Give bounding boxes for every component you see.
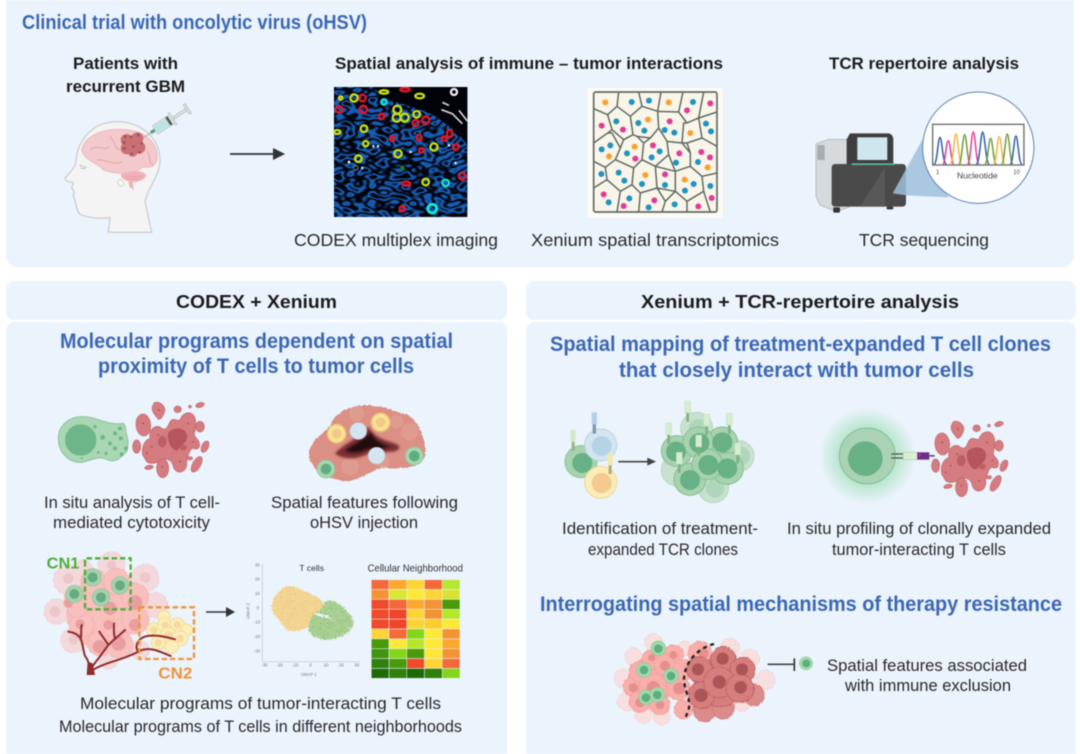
- heading: patients with recurrent GBM: Patients with: [73, 54, 178, 73]
- icon: clonal T cell expansion: [565, 401, 754, 503]
- chart: cellular neighborhood heatmap: Cellular Neighborhood: [368, 564, 463, 575]
- caption: treatment-expanded clones: [562, 520, 758, 559]
- chart: T cells UMAP: 0: [257, 605, 260, 610]
- chart: cellular neighborhood heatmap: [368, 564, 463, 678]
- heading: spatial mapping: Spatial mapping of treatment-expanded T cell clones: [550, 333, 1051, 356]
- panel header: Xenium + TCR-repertoire analysis: [526, 281, 1076, 320]
- panel header: Xenium + TCR-repertoire analysis: Xenium + TCR-repertoire analysis: [641, 292, 959, 312]
- chart: T cells UMAP: -30: [254, 648, 261, 653]
- chart: T cells UMAP: UMAP 2: [246, 602, 251, 619]
- caption: TCR sequencing: TCR sequencing: [859, 230, 989, 250]
- chart: T cells UMAP: 30: [255, 562, 260, 567]
- chart: T cells UMAP: -20: [254, 634, 261, 639]
- caption: molecular programs of T cells: [59, 695, 462, 736]
- icon: glowing T cell binding tumor cell: [819, 408, 1010, 504]
- icon: sequencer with chromatogram callout: 1: [936, 170, 940, 176]
- caption: in situ profiling: [787, 520, 1051, 559]
- caption: spatial features: Spatial features following: [271, 494, 458, 512]
- caption: T cell cytotoxicity: In situ analysis of T cell-: [44, 494, 220, 512]
- panel header: CODEX + Xenium: [6, 281, 507, 320]
- chart: T cells UMAP: 0: [309, 662, 312, 667]
- caption: Xenium: Xenium spatial transcriptomics: [531, 230, 779, 250]
- heading: spatial mapping: [550, 333, 1051, 382]
- heading: clinical trial: Clinical trial with oncolytic virus (oHSV): [22, 12, 367, 34]
- caption: treatment-expanded clones: Identification of treatment-: [562, 520, 758, 538]
- caption: molecular programs of T cells: Molecular programs of tumor-interacting T cells: [80, 695, 441, 713]
- caption: immune exclusion: with immune exclusion: [844, 677, 1011, 695]
- illustration: cellular neighborhoods CN1 and CN2: [44, 552, 194, 682]
- caption: T cell cytotoxicity: mediated cytotoxicity: [53, 514, 211, 532]
- heading: TCR repertoire analysis: TCR repertoire analysis: [829, 54, 1019, 73]
- caption: treatment-expanded clones: expanded TCR clones: [588, 541, 738, 559]
- caption: CODEX: CODEX multiplex imaging: [294, 230, 498, 250]
- illustration: immune exclusion at tumor boundary: [614, 634, 775, 725]
- heading: molecular programs: proximity of T cells to tumor cells: [98, 355, 414, 378]
- panel: CODEX + Xenium findings: [6, 322, 507, 754]
- chart: T cells UMAP: T cells: [299, 563, 325, 573]
- chart: T cells UMAP: -10: [254, 620, 261, 625]
- caption: in situ profiling: In situ profiling of clonally expanded: [787, 520, 1051, 538]
- chart: T cells UMAP: 10: [255, 591, 260, 596]
- chart: T cells UMAP: -20: [277, 662, 283, 667]
- icon: T cell attacking tumor cell: [58, 402, 211, 478]
- panel: Xenium + TCR findings: [526, 322, 1076, 754]
- icon: inhibition of T cell: [768, 656, 813, 671]
- heading: patients with recurrent GBM: [66, 54, 185, 96]
- panel: clinical trial overview: [6, 0, 1074, 267]
- heading: spatial mapping: that closely interact with tumor cells: [619, 359, 974, 382]
- chart: T cells UMAP: 20: [255, 577, 260, 582]
- caption: spatial features: oHSV injection: [310, 514, 418, 532]
- chart: T cells UMAP: -30: [261, 662, 268, 667]
- icon: sequencer with chromatogram callout: [816, 92, 1034, 213]
- icon: sequencer with chromatogram callout: 10: [1013, 170, 1021, 176]
- caption: immune exclusion: Spatial features associated: [827, 657, 1027, 675]
- chart: T cells UMAP: [246, 562, 360, 677]
- icon: head with brain tumor and syringe: [65, 103, 192, 232]
- icon: sequencer with chromatogram callout: Nucleotide: [957, 171, 998, 181]
- chart: T cells UMAP: 30: [354, 662, 360, 667]
- chart: T cells UMAP: UMAP 1: [301, 672, 317, 677]
- panel header: CODEX + Xenium: CODEX + Xenium: [176, 292, 337, 312]
- illustration: cellular neighborhoods CN1 and CN2: CN2: [158, 665, 192, 682]
- heading: patients with recurrent GBM: recurrent GBM: [66, 77, 185, 96]
- arrow: tissue to analysis: [206, 607, 235, 617]
- caption: immune exclusion: [827, 657, 1027, 695]
- caption: spatial features: [271, 494, 458, 532]
- chart: T cells UMAP: 10: [324, 662, 329, 667]
- image: Xenium cell segmentation: [587, 88, 723, 218]
- heading: molecular programs: [60, 330, 453, 378]
- chart: T cells UMAP: -10: [292, 662, 299, 667]
- illustration: cellular neighborhoods CN1 and CN2: CN1: [47, 555, 79, 572]
- arrow: patients to spatial analysis: [230, 148, 285, 160]
- heading: spatial analysis: Spatial analysis of immune – tumor interactions: [335, 54, 723, 73]
- icon: tumor with spatial features after oHSV: [309, 406, 425, 481]
- caption: in situ profiling: tumor-interacting T cells: [832, 541, 1006, 559]
- chart: T cells UMAP: 20: [339, 662, 344, 667]
- caption: T cell cytotoxicity: [44, 494, 220, 532]
- image: CODEX multiplex tissue: [334, 87, 467, 217]
- caption: molecular programs of T cells: Molecular programs of T cells in different neighborhoods: [59, 718, 462, 736]
- heading: therapy resistance: Interrogating spatial mechanisms of therapy resistance: [540, 593, 1062, 616]
- heading: molecular programs: Molecular programs dependent on spatial: [60, 330, 453, 353]
